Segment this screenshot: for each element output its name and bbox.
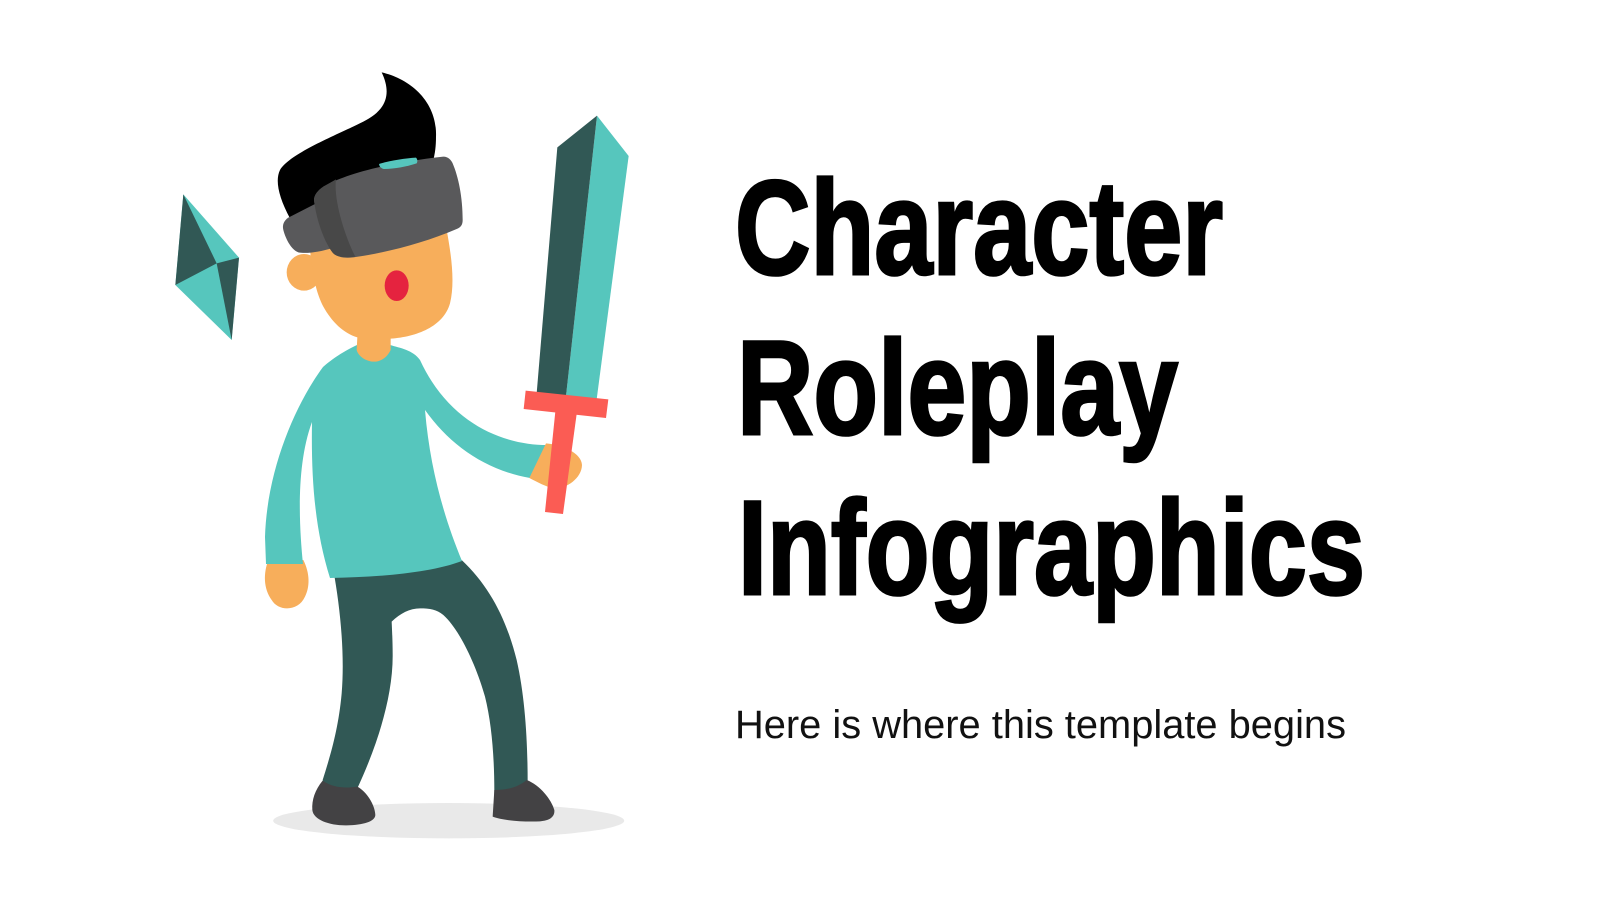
visor side [314, 179, 355, 257]
blade light face [566, 116, 629, 399]
guard [524, 391, 608, 418]
blade dark face [537, 116, 597, 396]
icon: sword [524, 116, 629, 514]
lowered hand [265, 560, 309, 608]
left shoe [312, 781, 375, 825]
mouth [385, 270, 409, 301]
visor light [379, 158, 417, 169]
title: Infographics [738, 474, 1365, 623]
ground shadow [273, 803, 624, 838]
hair [278, 72, 436, 218]
handle [545, 412, 577, 514]
right shoe [493, 780, 554, 821]
title: Roleplay [737, 314, 1178, 463]
visor front [314, 157, 463, 258]
ear [287, 254, 321, 291]
subtitle: Here is where this template begins [735, 703, 1346, 747]
illustration: VR character with sword and gem [175, 72, 629, 838]
title: Character [735, 154, 1223, 303]
character legs [265, 560, 554, 825]
visor strap [283, 204, 332, 253]
face [310, 230, 452, 362]
icon: floating gem [175, 194, 239, 340]
title [735, 154, 1365, 623]
character head [278, 72, 463, 362]
character torso and arms [265, 345, 547, 578]
raised hand [529, 443, 582, 489]
